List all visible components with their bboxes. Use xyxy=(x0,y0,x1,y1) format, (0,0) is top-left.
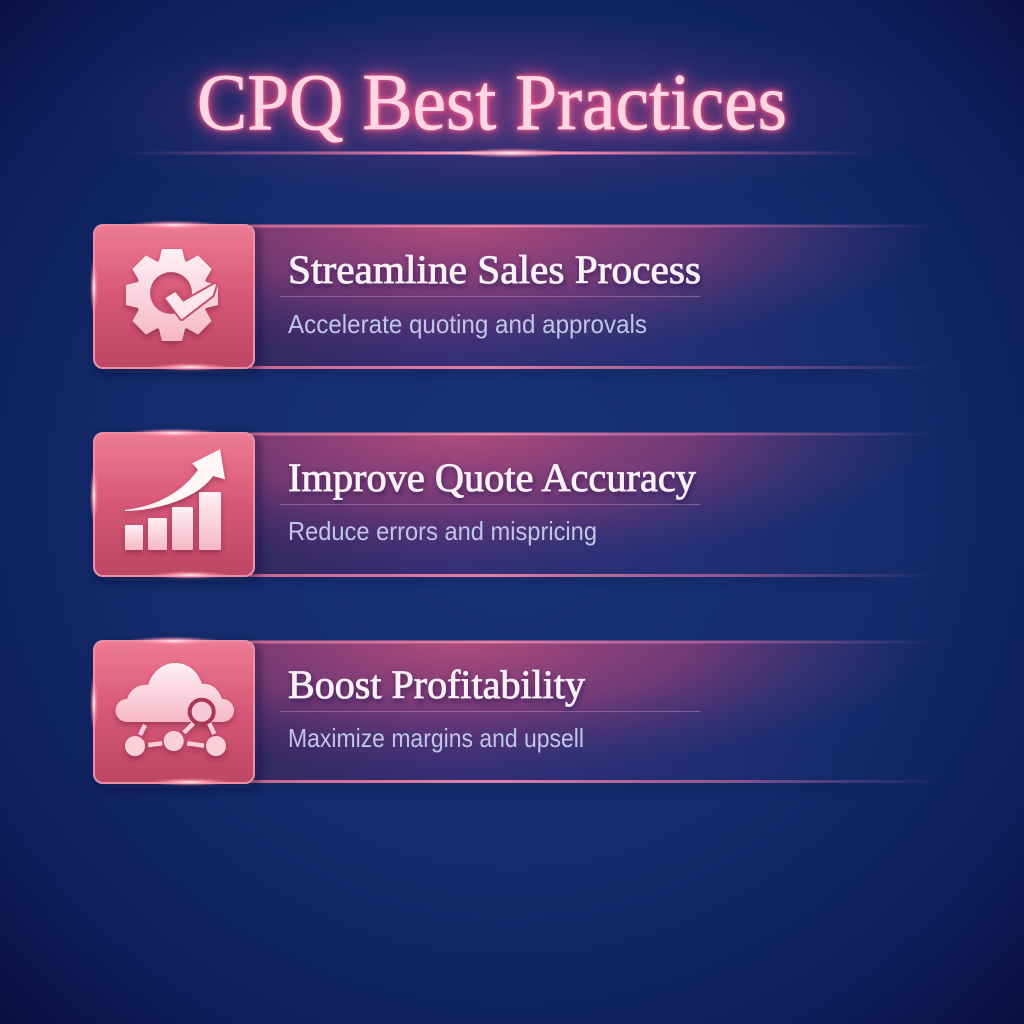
title: CPQ Best Practices xyxy=(197,59,787,147)
band xyxy=(250,640,940,791)
icon: gear with check xyxy=(126,249,218,341)
title: CPQ Best Practices xyxy=(197,59,787,147)
heading: Improve Quote Accuracy xyxy=(288,455,696,500)
icon tile xyxy=(90,428,254,579)
icon: cloud network xyxy=(116,663,234,756)
band xyxy=(250,224,940,376)
heading: Boost Profitability xyxy=(288,662,585,707)
description: Accelerate quoting and approvals xyxy=(288,309,647,339)
panel: boost profitability xyxy=(90,636,940,791)
icon tile xyxy=(90,636,254,786)
title glow backdrop xyxy=(60,10,940,210)
band xyxy=(250,432,940,584)
divider xyxy=(280,504,700,505)
divider xyxy=(280,711,700,712)
icon tile xyxy=(90,220,254,371)
title underline xyxy=(125,148,875,158)
heading: Streamline Sales Process xyxy=(288,247,701,292)
divider xyxy=(280,296,700,297)
panel: improve quote accuracy xyxy=(90,428,940,584)
panel: streamline sales process xyxy=(90,220,940,376)
title: CPQ Best Practices xyxy=(197,59,787,147)
description: Reduce errors and mispricing xyxy=(288,516,597,546)
icon: rising bar chart xyxy=(125,449,225,550)
description: Maximize margins and upsell xyxy=(288,723,584,753)
